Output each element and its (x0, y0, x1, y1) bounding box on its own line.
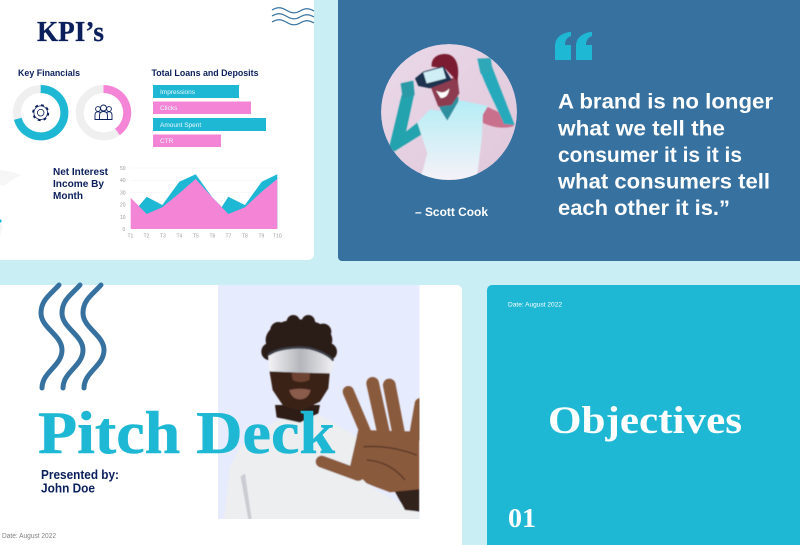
date: Date: August 2022 (2, 533, 56, 540)
area chart: net interest income: T4 (176, 234, 183, 240)
date: Date: August 2022 (508, 302, 562, 308)
area chart: net interest income: T10 (273, 234, 282, 240)
area chart: net interest income: 40 (120, 178, 126, 184)
neck (275, 405, 320, 423)
hair (261, 315, 337, 361)
heading: Net Interest Income By Month (53, 166, 108, 202)
icon: people (95, 105, 112, 120)
area chart: net interest income: 10 (120, 215, 126, 221)
quote text: what consumers tell (557, 170, 770, 194)
title: Pitch Deck: Pitch Deck (38, 400, 336, 466)
photo: woman with VR headset (381, 44, 517, 180)
heading: Net Interest Income By Month: Net Interest (53, 166, 108, 178)
visor (268, 347, 333, 373)
quote text: A brand is no longer (558, 90, 773, 114)
left arm (389, 95, 426, 152)
neck and face (435, 97, 458, 121)
right arm (483, 105, 514, 128)
panel: KPIs slide (0, 0, 314, 260)
panel: Objectives slide (487, 285, 800, 545)
area chart: net interest income: 20 (120, 202, 126, 208)
icon: small waves (272, 8, 314, 25)
icon: quotation mark (555, 32, 592, 60)
area chart: net interest income: T8 (242, 234, 248, 240)
area chart: net interest income: T5 (193, 234, 199, 240)
bar chart: loans and deposits: Amount Spent (160, 122, 201, 129)
quote text (557, 90, 773, 220)
presenter: Presented by: (41, 467, 119, 482)
hair (432, 54, 458, 82)
bar chart: loans and deposits: Impressions (160, 89, 196, 96)
quote text: what we tell the (557, 118, 725, 140)
heading: Net Interest Income By Month: Month (53, 190, 83, 202)
heading: Key Financials: Key Financials (18, 68, 80, 79)
bar chart: loans and deposits (153, 85, 266, 147)
VR headset (415, 66, 452, 88)
area chart: net interest income: T3 (160, 234, 166, 240)
shirt (224, 415, 419, 519)
icon: gear (33, 105, 48, 120)
heading: KPI's: KPI’s (37, 16, 104, 48)
icon: three wavy lines (41, 285, 104, 388)
quote text: consumer it is it is (558, 144, 742, 167)
hand (322, 383, 421, 475)
quote attribution: – Scott Cook (415, 205, 488, 219)
decorative map fragment (0, 170, 21, 236)
area chart: net interest income: T1 (128, 234, 134, 240)
fists (401, 81, 415, 98)
presenter: John Doe (41, 480, 95, 496)
area chart: net interest income (120, 166, 282, 240)
heading: Objectives: Objectives (548, 399, 742, 442)
bar chart: loans and deposits: Clicks (160, 105, 178, 112)
area chart: net interest income: 30 (120, 190, 126, 196)
photo: man with visor (218, 285, 421, 519)
area chart: net interest income: T2 (144, 234, 150, 240)
presenter (41, 467, 119, 496)
area chart: net interest income: T6 (210, 234, 216, 240)
quote text: each other it is.” (558, 197, 730, 220)
bar chart: loans and deposits: CTR (160, 138, 174, 145)
heading: Total Loans and Deposits: Total Loans and Deposits (152, 68, 258, 79)
face (269, 370, 330, 411)
slide number: 01 (508, 503, 536, 533)
panel: quote slide (338, 0, 800, 261)
area chart: net interest income: T7 (226, 234, 232, 240)
donut chart: financials (17, 89, 64, 136)
panel: Pitch Deck title slide (0, 285, 462, 545)
area chart: net interest income: T9 (258, 234, 265, 240)
area chart: net interest income: 0 (122, 227, 126, 233)
donut chart: people (80, 89, 127, 136)
area chart: net interest income: 50 (120, 166, 126, 172)
shirt (417, 100, 488, 180)
heading: Net Interest Income By Month: Income By (53, 178, 104, 190)
